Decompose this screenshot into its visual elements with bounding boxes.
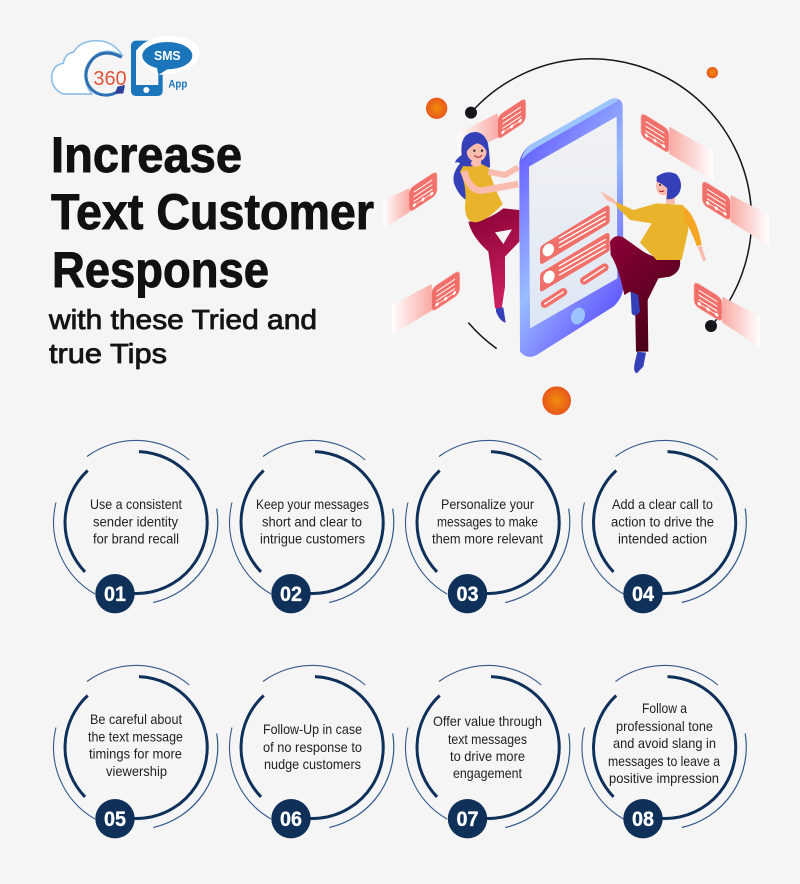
panel: tip 08: messages to leave a [608,753,720,769]
panel: tip 02: intrigue customers [260,530,365,546]
panel: tip 02 [230,440,394,613]
panel: tip 05: Be careful about [90,711,182,727]
panel: tip 02: 02 [280,583,302,606]
panel: tip 01: for brand recall [93,530,179,546]
panel: tip 08: positive impression [609,770,719,786]
panel: tip 08 [582,665,746,838]
panel: tip 03: Personalize your [441,496,534,512]
panel: tip 01: sender identity [93,514,178,530]
logo: App [168,79,188,91]
panel: tip 05: the text message [88,728,183,744]
panel: tip 06: Follow-Up in case [263,721,362,737]
black dots [465,107,717,332]
panel: tip 05: 05 [104,808,126,831]
panel: tip 07: text messages [448,731,527,747]
subtitle: true Tips [49,338,167,369]
orange dots [426,67,718,415]
panel: tip 03: 03 [456,583,478,606]
panel: tip 03: them more relevant [432,530,543,546]
panel: tip 07: 07 [456,808,478,831]
panel: tip 07: to drive more [450,748,525,764]
panel: tip 06: 06 [280,808,302,831]
panel: tip 04: Add a clear call to [612,496,713,512]
orbit ring [468,59,752,349]
woman [453,132,519,323]
subtitle [48,304,317,369]
logo: SMS [154,49,181,63]
panel: tip 03: messages to make [437,514,538,530]
logo [52,36,200,96]
panel: tip 06: of no response to [263,739,362,755]
message card trails [383,113,769,347]
message cards [409,98,730,322]
panel: tip 05 [54,665,218,838]
title [51,127,374,298]
panel: tip 04: 04 [632,583,654,606]
panel: tip 03 [406,440,570,613]
panel: tip 04 [582,440,746,613]
panel: tip 08: 08 [632,808,654,831]
panel: tip 01 [54,440,218,613]
panel: tip 06 [230,665,394,838]
illustration: phone and people [383,59,769,415]
panel: tip 08: professional tone [616,718,713,734]
panel: tip 02: short and clear to [262,514,362,530]
panel: tip 05: timings for more [89,746,182,762]
panel: tip 06: nudge customers [264,756,361,772]
panel: tip 07: Offer value through [433,713,542,729]
logo: 360 [93,67,127,90]
title: Text Customer [51,184,374,240]
subtitle: with these Tried and [48,304,317,335]
panel: tip 01: 01 [104,583,126,606]
panel: tip 08: Follow a [642,700,687,716]
panel: tip 08: and avoid slang in [613,735,716,751]
panel: tip 01: Use a consistent [90,496,182,512]
panel: tip 07 [406,665,570,838]
panel: tip 04: action to drive the [611,514,714,530]
title: Increase [51,127,242,183]
phone [519,98,623,357]
panel: tip 04: intended action [618,530,707,546]
panel: tip 07: engagement [453,765,522,781]
panel: tip 02: Keep your messages [256,496,369,512]
panel: tip 05: viewership [106,763,167,779]
title: Response [52,242,269,298]
man [600,172,706,373]
